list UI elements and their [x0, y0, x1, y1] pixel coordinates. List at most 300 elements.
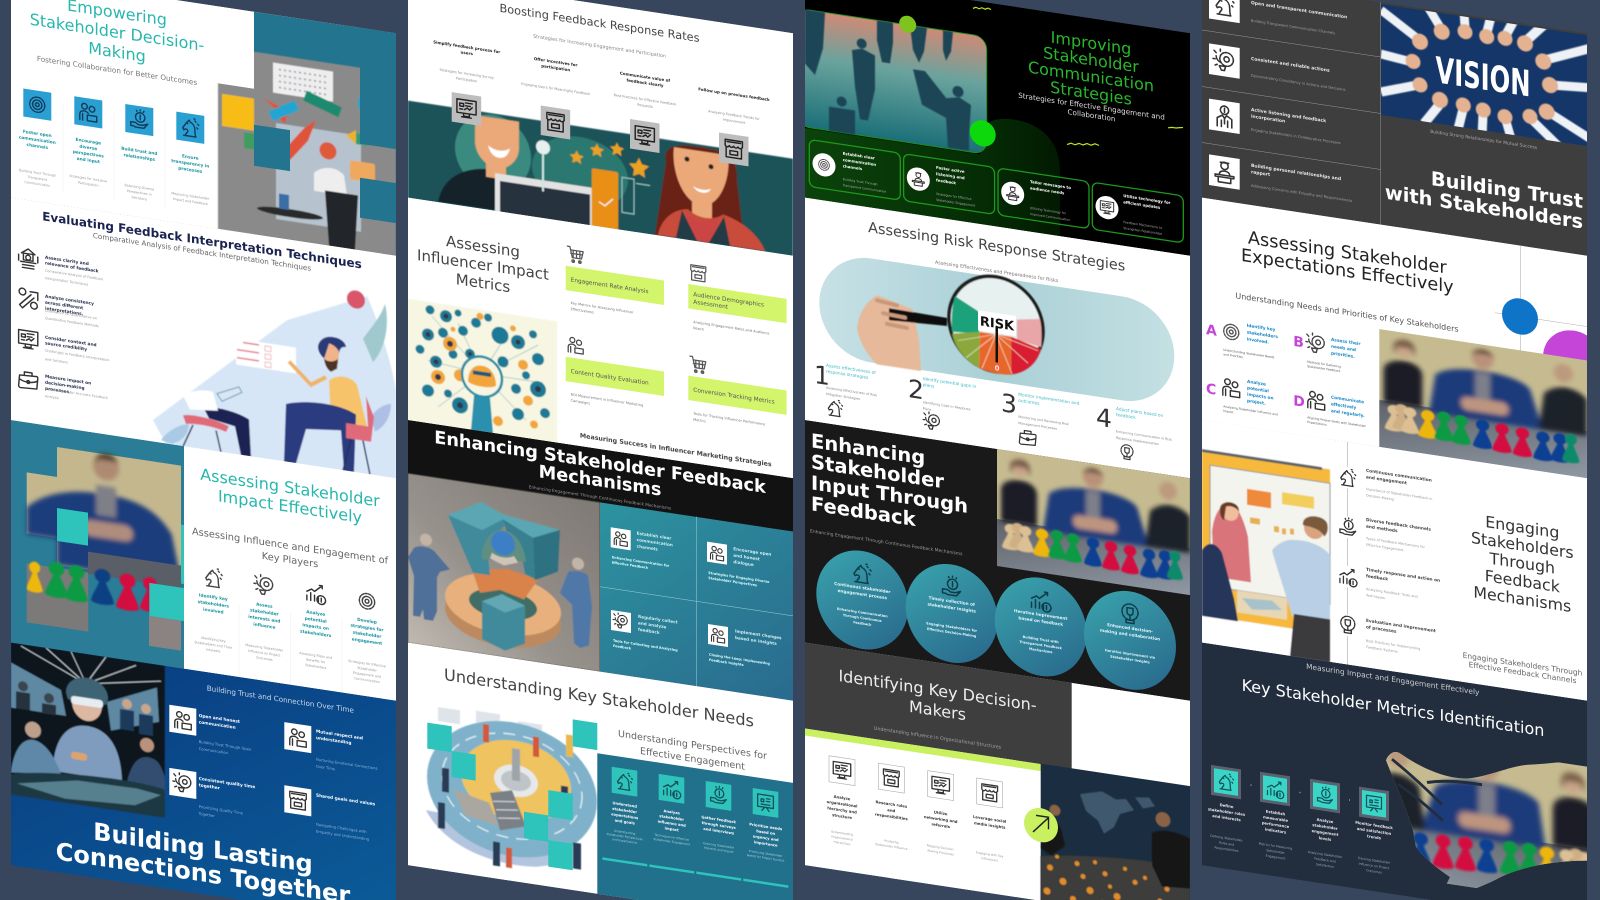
title: Stakeholder — [811, 450, 944, 493]
panel: teal items — [597, 753, 793, 900]
slide: Assessing Risk Response Strategies — [805, 198, 1190, 478]
card: Foster active listening and feedback: feedback — [936, 177, 956, 185]
row: Open and transparent communication: Open and transparent communication — [1251, 0, 1347, 21]
item B: Stakeholder Feedback — [1307, 364, 1341, 373]
circle: Iterative improvement: based on feedback — [1018, 615, 1063, 627]
circle: Timely collection: Timely collection of — [929, 595, 975, 607]
item: Evaluation and improvement: Evaluation and improvement — [1366, 618, 1436, 634]
item: Research roles: Research roles — [875, 799, 908, 809]
item: Analyze stakeholder influence — [649, 772, 694, 874]
subtitle: Collaboration — [1068, 107, 1115, 123]
item: Encourage open and honest dialogue: Encourage open — [733, 546, 771, 557]
item: Understand stakeholder expectations: Understanding — [614, 829, 635, 836]
illustration: teamwork blocks — [408, 473, 600, 672]
item: Assess stakeholder interests — [245, 572, 284, 664]
step: Monitor feedback: and satisfaction — [1357, 826, 1391, 836]
row: Open and transparent communication — [1209, 0, 1347, 39]
subtitle: Strategies for Effective Engagement and — [1018, 91, 1165, 122]
item: Communicate value: Requests — [637, 103, 653, 109]
step: Define stakeholder roles: and interests — [1212, 813, 1241, 822]
item: Encourage diverse perspectives and input: diverse — [79, 144, 97, 152]
title: Feedback — [1485, 566, 1561, 596]
step: Analyze stakeholder engagement levels: stakeholder — [1312, 822, 1338, 831]
step 1: Mitigation Strategies — [826, 392, 860, 401]
title: Feedback — [811, 492, 917, 531]
slide: Boosting Feedback Response Rates — [408, 0, 793, 257]
subtitle: Strategies for Increasing Engagement and Participation — [533, 34, 666, 60]
item: Analyze potential impacts: impacts on — [302, 622, 329, 632]
circle: Enhanced decision-making: Enhanced decision- — [1107, 622, 1153, 634]
item: Measure impact: decision-making — [45, 380, 85, 392]
step 2 — [908, 374, 977, 436]
item: Shared goals: Empathy and Understanding — [316, 830, 370, 842]
item: Communicate value: Communicate value of — [620, 71, 670, 83]
item C: Analyze — [1247, 379, 1266, 388]
photo: magnifying glass over risk gauge: 0 — [995, 363, 1000, 373]
title: Strategies — [1050, 78, 1132, 109]
item: Analyze stakeholder influence: Analyze — [664, 809, 680, 816]
slide: Enhancing Stakeholder Feedback Mechanisms — [408, 420, 793, 701]
item: Develop strategies: engagement — [352, 636, 382, 647]
step 4: feedback — [1116, 412, 1136, 421]
item: Consistent quality time — [169, 768, 255, 818]
item: Assess stakeholder interests: Influence on Project — [248, 649, 281, 658]
title: Mechanisms — [539, 461, 661, 501]
slide: Assessing Stakeholder Expectations Effectively — [1202, 198, 1600, 481]
step 3: Monitor implementation and — [1018, 392, 1080, 407]
item: Leverage social media: Engaging with Key — [976, 850, 1004, 859]
title: Assessing Risk Response Strategies — [868, 220, 1125, 275]
item: Understand stakeholder expectations — [602, 765, 647, 867]
item: Assess stakeholder interests: Outcomes — [256, 656, 273, 662]
item: Regularly collect and analyze feedback: and analyze — [638, 620, 667, 630]
item: Analyze organizational hierarchy: organizational — [827, 799, 857, 809]
slide: Identifying Key Decision-Makers — [805, 642, 1190, 900]
item: Implement changes based on insights — [708, 624, 782, 673]
step: Establish measurable performance indicators: measurable — [1263, 814, 1288, 823]
item: Prioritize needs: Prioritize needs — [749, 822, 783, 832]
card: Foster active listening and feedback: Strategies for Effective — [936, 192, 972, 201]
item D: D — [1293, 393, 1305, 411]
row: Consistent and reliable actions: Demonstrating Consistency in Actions and Decisions — [1251, 74, 1346, 92]
item: Open and honest communication: Open and honest — [199, 713, 240, 725]
step: Analyze stakeholder engagement levels: engagement — [1312, 828, 1339, 837]
item D: and regularly. — [1331, 408, 1365, 419]
item: Shared goals: Navigating Challenges with — [316, 823, 367, 834]
item: Establish clear communication channels — [611, 527, 673, 574]
item: Identify key stakeholders: Identify key — [199, 592, 228, 603]
subtitle: Building Strong Relationships for Mutual Success — [1430, 129, 1538, 151]
item: Analyze stakeholder influence: stakeholder — [659, 814, 684, 822]
item: Regularly collect and analyze feedback: Tools for Collecting and Analyzing — [613, 639, 678, 653]
item: Analyze organizational hierarchy — [827, 755, 857, 847]
green dots — [899, 15, 916, 34]
item: Evaluation and improvement: Best Practices for Implementing — [1366, 639, 1420, 651]
title: Metrics — [456, 270, 510, 296]
item: Identify key stakeholders: Stakeholders and Their — [194, 640, 233, 650]
item: Assess clarity: Interpretation Techniques — [45, 276, 89, 287]
item: Regularly collect and analyze feedback: feedback — [638, 627, 660, 635]
subtitle: Effective Engagement — [640, 746, 745, 773]
subtitle: Comparative Analysis of Feedback Interpretation Techniques — [93, 231, 311, 273]
item: Utilize networking: Mapping Decision- — [927, 843, 954, 852]
circle: Continuous stakeholder engagement process: Feedback — [853, 620, 872, 627]
item: Foster open communication channels: Building Trust Through — [19, 168, 56, 178]
item: Implement changes based on insights: Feedback Insights — [709, 658, 744, 667]
item: Analyze consistency: across different — [45, 300, 83, 311]
circle: Iterative improvement: Building Trust with — [1023, 635, 1059, 644]
card: Tailor messages to audience needs: Improved Communication — [1030, 212, 1070, 222]
slide: Engaging Stakeholders Through Feedback Mechanisms — [1202, 420, 1587, 701]
step: Define stakeholder roles — [1208, 764, 1246, 854]
item: Understand stakeholder expectations: Stakeholder Perspectives — [606, 832, 643, 841]
item: Open and honest communication: Communication — [199, 747, 228, 755]
item B: Methods for Gathering — [1307, 360, 1341, 369]
item: Assess stakeholder interests: interests and — [248, 614, 280, 625]
step: Define stakeholder roles: Define — [1220, 802, 1234, 809]
item D: Communicate — [1331, 395, 1364, 405]
item: Prioritize needs: Needs for Project Success — [747, 853, 785, 863]
item: Encourage open and honest dialogue: dialogue — [733, 559, 754, 567]
item: Consistent quality time: Together — [198, 812, 215, 818]
item B: priorities. — [1331, 350, 1355, 360]
item: Prioritize needs: urgency and — [753, 834, 779, 842]
item: Analyze potential impacts: Assessing Risks and — [299, 651, 332, 660]
item: Continuous communication: Importance of Stakeholder Feedback in — [1366, 487, 1432, 501]
column 3 of slides — [797, 0, 1190, 900]
item: Identify key stakeholders: Interests — [206, 647, 221, 654]
item: Encourage open and honest dialogue — [707, 542, 771, 590]
row: Active listening: incorporation — [1251, 114, 1285, 125]
item A: involved. — [1247, 336, 1269, 346]
item A: A — [1206, 322, 1217, 340]
item: Establish clear communication channels: channels — [637, 544, 658, 552]
item A: stakeholders — [1247, 330, 1278, 340]
illustration: influencer network — [408, 299, 557, 443]
item D — [1293, 389, 1367, 433]
title: Understanding Key Stakeholder Needs — [444, 665, 754, 731]
item: Communicate value: feedback clearly — [626, 78, 664, 88]
item: Establish clear communication channels: Enhancing Communication for — [612, 555, 670, 568]
item: Establish clear communication channels: Establish clear — [637, 531, 672, 541]
metric: Audience Demographics Assessment: Analyzing Engagement Rates and Audience — [693, 320, 769, 336]
item: Understand stakeholder expectations: stakeholder — [612, 807, 637, 815]
card: Utilize technology for efficient updates — [1092, 182, 1183, 243]
item: Timely response — [1337, 562, 1440, 609]
slide: Improving Stakeholder Communication Strategies — [797, 0, 1190, 256]
item: Follow up: Follow up on previous feedback — [698, 86, 770, 102]
item: Mutual respect: Mutual respect and — [316, 729, 363, 742]
item: Diverse feedback channels — [1337, 513, 1431, 557]
item: Simplify feedback process: users — [461, 49, 473, 56]
circle: Enhanced decision-making: Iterative Improvement via — [1105, 648, 1156, 660]
step: Monitor feedback: Monitor feedback — [1355, 820, 1393, 830]
item: Build trust and relationships: Balancing Diverse — [124, 183, 154, 192]
illustration: stakeholder platform — [426, 703, 597, 881]
item: Ensure transparency in processes: processes — [178, 165, 203, 175]
item: Ensure transparency in processes: Impact and Feedback — [173, 197, 208, 206]
card: Establish clear communication channels: Building Trust Through — [843, 177, 878, 186]
subtitle: Fostering Collaboration for Better Outcomes — [37, 54, 197, 87]
footer subtitle: Measuring Success in Influencer Marketing Strategies — [580, 432, 772, 468]
item: Diverse feedback channels: Types of Feedback Mechanisms for — [1365, 536, 1426, 549]
slide: Enhancing Stakeholder Input Through Feedback — [805, 420, 1190, 701]
item B — [1293, 330, 1361, 376]
item: Develop strategies: Stakeholder — [357, 666, 377, 673]
item: Implement changes based on insights: Closing the Loop: Implementing — [709, 653, 771, 666]
item C: Impact — [1223, 409, 1234, 414]
item: Identify key stakeholders: involved — [203, 607, 224, 616]
subtitle: Measuring Impact and Engagement Effectively — [1306, 662, 1480, 697]
title: Stakeholder Decision- — [30, 10, 204, 55]
row: Consistent and reliable actions: Consistent and reliable actions — [1251, 56, 1330, 74]
item: Foster open communication channels — [19, 88, 56, 189]
slide: Building Trust with Stakeholders — [1202, 0, 1592, 257]
item: Analyze organizational hierarchy: Understanding — [831, 829, 853, 837]
title: Stakeholder — [1043, 43, 1139, 77]
item: Leverage social media — [973, 777, 1006, 864]
step: Establish measurable performance indicators: performance — [1262, 820, 1290, 829]
photo: magnifying glass over risk gauge: RISK — [980, 314, 1015, 335]
item: Regularly collect and analyze feedback: Regularly collect — [638, 614, 678, 625]
item: Utilize networking: Making Processes — [928, 849, 954, 857]
item: Gather feedback: through surveys — [702, 821, 737, 830]
step 4: Enhancing Communication in Risk — [1116, 429, 1172, 442]
step 4 — [1096, 403, 1172, 466]
title: Assessing Stakeholder — [200, 465, 380, 511]
item: Prioritize needs — [743, 787, 788, 888]
item: Foster open communication channels: Foster open — [23, 129, 52, 139]
item: Analyze organizational hierarchy: Organizational — [831, 834, 853, 842]
step: Monitor feedback: Influence on Project — [1359, 862, 1390, 870]
card: Foster active listening and feedback: Foster active — [936, 165, 965, 174]
item: Timely response: Analyzing Feedback: Tools and — [1366, 587, 1418, 599]
subtitle: Assessing Effectiveness and Preparedness for Risks — [935, 260, 1059, 284]
item: Analyze organizational hierarchy: hierarchy and — [827, 805, 857, 815]
item: Consistent quality time: Prioritizing Quality Time — [199, 805, 244, 816]
item: Analyze stakeholder influence: Techniques for Effective — [653, 833, 689, 842]
row: Building personal relationships: Addressing Concerns with Empathy and Responsiveness — [1251, 184, 1352, 203]
subtitle: Engaging Stakeholders Through — [1463, 651, 1583, 678]
item: Utilize networking: Utilize — [934, 809, 948, 816]
item: Encourage diverse perspectives and input: Encourage — [76, 137, 101, 147]
item: Analyze potential impacts: Stakeholders — [305, 663, 327, 670]
row: Building personal relationships: Building personal relationships and — [1251, 163, 1341, 182]
title: Assessing Stakeholder — [1248, 228, 1447, 279]
title: Evaluating Feedback Interpretation Techniques — [42, 209, 362, 271]
item B: needs and — [1331, 344, 1356, 353]
subtitle: Building Trust and Connection Over Time — [207, 684, 354, 715]
circle: Timely collection: stakeholder insights — [928, 602, 976, 614]
item: Foster open communication channels: Communication — [24, 180, 50, 188]
column 4 of slides — [1202, 0, 1600, 900]
item: Open and honest communication: Building Trust Through Open — [199, 740, 252, 752]
item: Offer incentives: Offer incentives for — [534, 56, 578, 68]
item: Encourage diverse perspectives and input: and input — [77, 156, 100, 165]
item: Follow up: Analyzing Feedback Trends for — [708, 109, 760, 121]
circle: Timely collection: Engaging Stakeholders for — [926, 621, 977, 633]
item: Assess stakeholder interests: influence — [253, 621, 275, 631]
item: Develop strategies: strategies for — [351, 623, 384, 634]
title: Impact Effectively — [218, 486, 362, 527]
title: Input Through — [811, 471, 968, 518]
item: Consider context: Challenges in Feedback Interpretation — [45, 349, 110, 362]
slide: Key Stakeholder Metrics Identification — [1202, 642, 1600, 900]
step 4: Adjust plans based on — [1116, 406, 1164, 419]
item: Assess clarity — [19, 248, 103, 289]
item: Timely response: feedback — [1366, 573, 1388, 583]
card: Utilize technology for efficient updates: Strengthen Relationships — [1123, 226, 1162, 236]
item A: Understanding Stakeholder Needs — [1223, 348, 1275, 359]
item A — [1206, 317, 1278, 365]
step 3: outcomes — [1018, 398, 1040, 407]
card: Foster active listening and feedback: listening and — [936, 171, 965, 180]
row: Consistent and reliable actions — [1209, 43, 1346, 95]
title: Enhancing Stakeholder Feedback — [434, 427, 767, 498]
item: Communicate value — [614, 70, 676, 156]
illustration: customers giving feedback — [408, 101, 793, 257]
metric: Content Quality Evaluation: Content Quality Evaluation — [571, 369, 649, 387]
item: Continuous communication: Decision-Making — [1366, 493, 1394, 502]
step: Analyze stakeholder engagement levels: Satisfaction — [1316, 862, 1334, 869]
item: Consider context: and Solutions — [45, 357, 68, 365]
item: Analyze organizational hierarchy: Analyze — [834, 794, 851, 801]
column 1 of slides — [11, 0, 396, 900]
item: Foster open communication channels: Transparent — [27, 175, 48, 182]
photo: meeting with pawns — [1379, 329, 1587, 478]
circle: Continuous stakeholder engagement process: engagement process — [838, 588, 888, 600]
item: Develop strategies — [348, 591, 386, 685]
item: Encourage diverse perspectives and input: Participation — [78, 181, 99, 188]
step 1: 1 — [814, 360, 830, 391]
item: Offer incentives: Engaging Users for Meaningful Feedback — [521, 82, 590, 96]
item: Assess stakeholder interests: Measuring Stakeholder — [245, 643, 284, 653]
step: Define stakeholder roles: Roles and — [1219, 841, 1234, 847]
step: Monitor feedback: trends — [1367, 833, 1382, 841]
panel: title band — [805, 642, 1072, 769]
slide: Assessing Influencer Impact Metrics — [408, 198, 793, 479]
item: Gather feedback — [696, 780, 741, 881]
photo: reflected silhouettes — [797, 8, 987, 154]
item: Implement changes based on insights: Implement changes — [735, 628, 782, 640]
card: Establish clear communication channels: Establish clear — [843, 151, 875, 161]
illustration: two people talking — [153, 290, 396, 478]
item: Develop strategies: Strategies for Effective — [348, 659, 386, 669]
step: Establish measurable performance indicators: Establish — [1266, 809, 1286, 817]
item: Develop strategies: stakeholder — [353, 630, 382, 640]
item C: project. — [1247, 398, 1266, 407]
item: Implement changes based on insights: based on insights — [735, 635, 777, 646]
card: Tailor messages to audience needs: Tailor messages to — [1030, 179, 1071, 190]
item: Consider context — [18, 328, 110, 364]
photo: meeting with pawns — [997, 449, 1190, 596]
step: Analyze stakeholder engagement levels: Analyze — [1317, 817, 1334, 824]
photo: blurred meeting with pawns — [27, 442, 182, 651]
item: Diverse feedback channels: and methods — [1366, 524, 1398, 534]
item: Mutual respect: Nurturing Emotional Connections — [316, 758, 378, 771]
item: Offer incentives — [521, 54, 590, 143]
item: Assess clarity: relevance of feedback — [45, 260, 99, 275]
subtitle: Understanding Perspectives for — [618, 729, 767, 762]
step: Analyze stakeholder engagement levels — [1308, 778, 1343, 870]
step 1: Assess effectiveness of — [826, 363, 876, 376]
item: Identify key stakeholders: Identifying Key — [201, 636, 226, 643]
title: Key Stakeholder Metrics Identification — [1242, 676, 1544, 740]
subtitle: Understanding Influence in Organizational Structures — [874, 726, 1002, 751]
decorative squares — [427, 697, 597, 874]
item: Evaluation and improvement: of processes — [1366, 624, 1397, 635]
item: Analyze potential impacts: Benefits for — [306, 658, 326, 665]
item: Measure impact: Analysis — [45, 394, 59, 400]
item A: and Priorities — [1223, 352, 1243, 359]
metric: Audience Demographics Assessment: Assessment — [693, 300, 729, 311]
circle: Iterative improvement: Transparent Feedback — [1020, 640, 1063, 650]
item: Simplify feedback process — [433, 39, 500, 129]
item: Analyze potential impacts: stakeholders — [300, 629, 332, 639]
step: Define stakeholder roles: stakeholder roles — [1208, 806, 1246, 817]
title: Expectations Effectively — [1241, 245, 1454, 298]
metric: Engagement Rate Analysis: Engagement Rate Analysis — [571, 278, 649, 295]
item: Encourage diverse perspectives and input: perspectives — [73, 149, 104, 160]
item: Prioritize needs: Prioritizing Stakeholder — [749, 849, 783, 858]
title: Influencer Impact — [417, 246, 549, 284]
step 1: Assessing Effectiveness of Risk — [826, 386, 877, 397]
column 2 of slides — [408, 0, 793, 900]
item: Analyze consistency — [19, 288, 99, 328]
card: Utilize technology for efficient updates: Feedback Mechanisms to — [1123, 220, 1162, 230]
title: Assessing — [446, 232, 520, 261]
step: Analyze stakeholder engagement levels: Feedback and — [1314, 856, 1336, 864]
step 2: Identifying Gaps in Response — [923, 400, 970, 411]
item: Prioritize needs: based on — [756, 829, 776, 836]
step 3: Monitoring and Reviewing Risk — [1018, 415, 1069, 426]
shape: purple circle — [1543, 326, 1600, 397]
item: Analyze consistency: Analyze consistency — [45, 294, 94, 307]
step: Define stakeholder roles: Responsibilities — [1215, 845, 1239, 853]
row: Active listening: Engaging Stakeholders in Collaborative Processes — [1251, 128, 1341, 145]
item: Gather feedback: Ensuring Stakeholder — [703, 841, 735, 850]
item: Develop strategies: Develop — [357, 617, 377, 626]
item: Timely response: Timely response and action on — [1366, 567, 1440, 584]
circle: Continuous stakeholder engagement process: Through Continuous — [843, 613, 882, 623]
item: Utilize networking: referrals — [931, 821, 951, 829]
item A: Identify key — [1247, 323, 1276, 333]
item: Leverage social media: Leverage social — [973, 814, 1006, 824]
item: Encourage diverse perspectives and input — [69, 96, 107, 189]
item: Build trust and relationships: Decisions — [131, 195, 147, 202]
card: Tailor messages to audience needs: Utilizing Technology for — [1030, 206, 1067, 216]
item: Simplify feedback process: Participation — [456, 76, 477, 83]
item: Regularly collect and analyze feedback: Feedback — [613, 644, 632, 651]
subtitle: Understanding Needs and Priorities of Key Stakeholders — [1235, 291, 1459, 334]
item: Encourage diverse perspectives and input: Strategies for Inclusive — [69, 174, 107, 184]
item: Encourage open and honest dialogue: Stakeholder Perspectives — [708, 576, 757, 587]
card: Establish clear communication channels — [809, 139, 900, 200]
item D: Aligning Project Goals with Stakeholder — [1307, 415, 1367, 428]
item: Understand stakeholder expectations: and Expectations — [612, 837, 638, 845]
item: Gather feedback: and interviews — [703, 827, 735, 836]
item: Shared goals — [284, 785, 376, 843]
slide: Building Lasting Connections Together — [11, 642, 396, 900]
card: Utilize technology for efficient updates: Utilize technology for — [1123, 193, 1171, 205]
metric: Conversion Tracking Metrics: Tools for Tracking Influencer Performance — [692, 411, 765, 426]
item: Measure impact: Measure impact on — [45, 374, 91, 387]
item: Develop strategies: Engagement and — [353, 671, 381, 679]
item: Analyze stakeholder influence: impact — [665, 826, 679, 833]
item: Ensure transparency in processes — [171, 111, 210, 207]
item: Regularly collect and analyze feedback — [611, 610, 678, 658]
item: Diverse feedback channels: Effective Engagement — [1366, 543, 1404, 552]
